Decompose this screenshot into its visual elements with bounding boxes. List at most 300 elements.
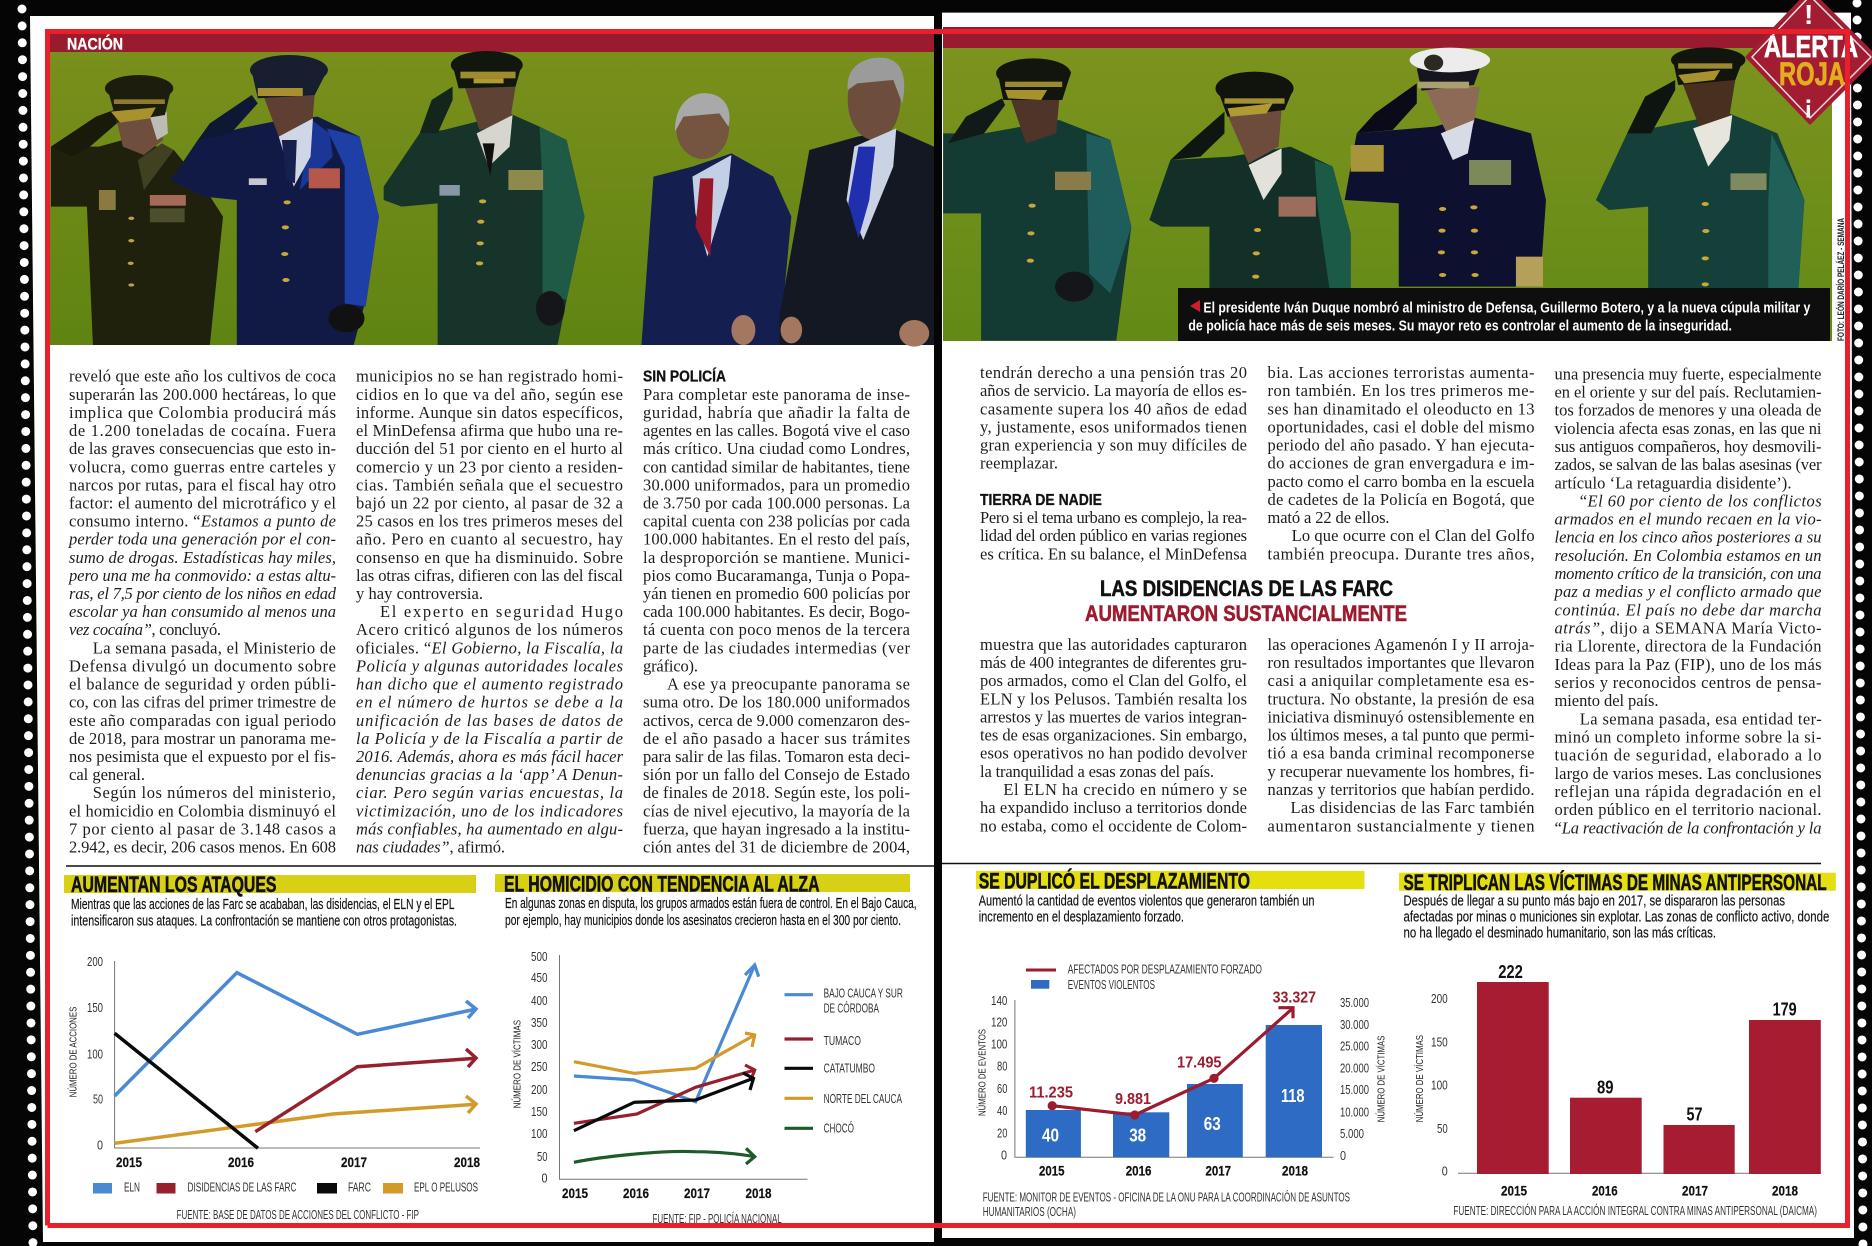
- badge exclamation bottom: ¡: [1804, 89, 1813, 119]
- article column 2: 25 casos en los tres primeros meses del: [356, 512, 623, 531]
- article column 6: atrás”, dijo a SEMANA María Victo-: [1554, 618, 1822, 638]
- badge word roja: ROJA: [1779, 56, 1845, 92]
- article column 4 with subheading: [980, 363, 1248, 835]
- chart 2 line: Norte del Cauca: [574, 1033, 755, 1073]
- pull quote heading: LAS DISIDENCIAS DE LAS FARC: [1100, 576, 1393, 601]
- article column 2: las otras cifras, difieren con las del fiscal: [356, 566, 623, 585]
- chart 2 axes and tick labels: 450: [531, 971, 548, 985]
- article column 6: [1554, 364, 1822, 837]
- article column 5: iniciativa disminuyó ostensiblemente en: [1268, 708, 1534, 726]
- article column 3 with subheading: yán tienen en promedio 600 policías por: [643, 584, 910, 603]
- article column 6: La semana pasada, esa entidad ter-: [1580, 709, 1822, 728]
- chart 3 axes and tick labels: 120: [991, 1016, 1007, 1030]
- article column 1: de 1.200 toneladas de cocaína. Fuera: [69, 421, 337, 440]
- chart 3 axes and tick labels: 35.000: [1340, 996, 1369, 1010]
- article column 2: Acero criticó algunos de los números: [356, 620, 623, 639]
- right page sheet: [942, 13, 1854, 1238]
- article column 2: informe. Aunque sin datos específicos,: [356, 403, 623, 422]
- caption marker: [1190, 300, 1200, 312]
- article column 3 with subheading: 100.000 habitantes. En el resto del país,: [643, 530, 910, 549]
- article column 6: tuación de seguridad, elaborado a lo: [1554, 746, 1822, 765]
- chart 3 axes and tick labels: 10.000: [1340, 1105, 1369, 1119]
- subheading: sin policía: SIN POLICÍA: [643, 369, 726, 386]
- chart 3 axes and tick labels: 2015: [1039, 1163, 1065, 1179]
- chart 3 axes and tick labels: NÚMERO DE EVENTOS: [976, 1029, 988, 1116]
- chart 2 description: En algunas zonas en disputa, los grupos armados están fuera de control. En el Bajo Cauca,: [505, 896, 917, 912]
- section band, left page: [50, 34, 934, 53]
- article column 6: ria Llorente, directora de la Fundación: [1554, 637, 1822, 656]
- article column 5: tructura. No obstante, la presión de esa: [1268, 689, 1535, 708]
- article column 2: victimización, uno de los indicadores: [356, 801, 623, 820]
- chart 3 line: afectados por desplazamiento forzado: 9.881: [1115, 1091, 1151, 1108]
- chart 3 heading bar: SE DUPLICÓ EL DESPLAZAMIENTO: [979, 868, 1250, 893]
- chart 3 axes and tick labels: 5.000: [1340, 1127, 1364, 1141]
- article column 6: zados, se salvan de las balas asesinas (ver: [1554, 455, 1822, 474]
- chart 4 axes and tick labels: 2016: [1592, 1183, 1618, 1199]
- chart 4 axes and tick labels: NÚMERO DE VÍCTIMAS: [1413, 1035, 1426, 1122]
- film strip perforations, right: [1857, 3, 1863, 1246]
- article column 3 with subheading: ción antes del 31 de diciembre de 2004,: [643, 838, 910, 857]
- article column 3 with subheading: 30.000 uniformados, para un promedio: [643, 475, 910, 494]
- chart 4 axes and tick labels: 150: [1431, 1035, 1448, 1049]
- article column 2: El experto en seguridad Hugo: [380, 602, 623, 621]
- chart 3 axes and tick labels: 25.000: [1340, 1040, 1369, 1054]
- chart 4 description: no ha llegado el desminado humanitario, son las más críticas.: [1404, 925, 1716, 941]
- article column 2: [355, 367, 624, 857]
- chart 2 axes and tick labels: 150: [531, 1105, 548, 1119]
- general 6 in green uniform: [943, 58, 1131, 341]
- chart 2 axes and tick labels: 0: [542, 1172, 548, 1186]
- chart 1 legend: ELN: [124, 1181, 140, 1195]
- article column 2: han dicho que el aumento registrado: [356, 675, 623, 694]
- chart 2 legend: TUMACO: [824, 1034, 861, 1048]
- chart 3 bars: eventos violentos: 63: [1204, 1114, 1221, 1134]
- article column 6: “El 60 por ciento de los conflictos: [1580, 491, 1822, 510]
- article column 6: serios y reconocidos centros de pensa-: [1554, 673, 1822, 692]
- chart 2 description: por ejemplo, hay municipios donde los asesinatos crecieron hasta en el 300 por ciento.: [505, 913, 901, 929]
- chart 3 description: Aumentó la cantidad de eventos violentos que generaron también un: [979, 894, 1314, 910]
- chart 1 line: disidencias de las FARC: [255, 1049, 476, 1132]
- article column 5: casi a aniquilar completamente esa es-: [1268, 671, 1534, 690]
- article column 6: en el oriente y sur del país. Reclutamien-: [1554, 382, 1822, 402]
- article column 4 with subheading: años de servicio. La mayoría de ellos es-: [980, 381, 1247, 400]
- article column 6: miento del país.: [1554, 691, 1658, 710]
- article column 5: bia. Las acciones terroristas aumenta-: [1268, 363, 1534, 382]
- chart 1 axes and tick labels: 200: [87, 955, 103, 969]
- chart 3 description: incremento en el desplazamiento forzado.: [979, 910, 1184, 926]
- article column 4 with subheading: Pero si el tema urbano es complejo, la rea-: [980, 508, 1247, 527]
- chart 1 axes and tick labels: 100: [87, 1048, 103, 1062]
- article column 1: co, con las cifras del primer trimestre de: [69, 693, 336, 712]
- chart 4 bars: 57: [1686, 1105, 1702, 1125]
- article column 3 with subheading: A ese ya preocupante panorama se: [667, 675, 910, 694]
- chart 4 axes and tick labels: 100: [1431, 1079, 1448, 1093]
- article column 1: Defensa divulgó un documento sobre: [69, 656, 336, 676]
- article column 5: tió a esa banda criminal recomponerse: [1268, 744, 1534, 763]
- article column 5: pacto como el carro bomba en la escuela: [1268, 472, 1535, 491]
- article column 4 with subheading: lidad del orden público en varias regiones: [980, 526, 1247, 545]
- chart 2 axes and tick labels: 2016: [623, 1185, 649, 1201]
- chart 2 axes and tick labels: NÚMERO DE VÍCTIMAS: [510, 1020, 524, 1108]
- chart 1 source: FUENTE: BASE DE DATOS DE ACCIONES DEL CONFLICTO - FIP: [177, 1208, 419, 1222]
- article column 2: 2016. Además, ahora es más fácil hacer: [356, 747, 624, 766]
- article column 5: periodo del año pasado. Y han ejecuta-: [1268, 436, 1534, 454]
- chart 2 legend: NORTE DEL CAUCA: [824, 1092, 902, 1106]
- chart 1 legend: FARC: [348, 1181, 371, 1195]
- left page sheet: [30, 16, 934, 1242]
- article column 2: la Policía y de la Fiscalía a partir de: [356, 729, 623, 748]
- chart 3 bars: eventos violentos: 38: [1129, 1126, 1146, 1146]
- chart 3 axes and tick labels: 2016: [1126, 1163, 1152, 1179]
- article column 6: sus antiguos compañeros, hoy desmovili-: [1554, 437, 1822, 456]
- article column 6: lencia en los cinco años posteriores a su: [1554, 528, 1822, 547]
- chart 1 line: ELN: [115, 973, 476, 1096]
- chart 3 axes and tick labels: 140: [991, 994, 1007, 1008]
- chart 3 axes and tick labels: 2018: [1282, 1163, 1308, 1179]
- article column 6: una presencia muy fuerte, especialmente: [1554, 364, 1822, 383]
- article column 1: 7 por ciento al pasar de 3.148 casos a: [69, 820, 337, 838]
- article column 6: violencia afecta esas zonas, en las que ni: [1554, 419, 1822, 438]
- article column 3 with subheading: la desproporción se mantiene. Munici-: [643, 548, 910, 567]
- article column 3 with subheading: guridad, habría que añadir la falta de: [643, 403, 910, 422]
- article column 6: artículo ‘La retaguardia disidente’).: [1554, 473, 1792, 492]
- chart 1 legend: [93, 1181, 478, 1195]
- article column 1: vez cocaína”, concluyó.: [69, 620, 221, 639]
- article column 2: año. Pero en cuanto al secuestro, hay: [356, 530, 624, 549]
- article column 1: reveló que este año los cultivos de coca: [69, 367, 337, 386]
- chart 3 axes and tick labels: 2017: [1206, 1163, 1231, 1179]
- chart 4 axes and tick labels: 2015: [1501, 1183, 1527, 1199]
- article column 5: oportunidades, casi el doble del mismo: [1268, 417, 1534, 436]
- article column 3 with subheading: agentes en las calles. Bogotá vive el caso: [643, 421, 910, 440]
- chart 2 heading bar: EL HOMICIDIO CON TENDENCIA AL ALZA: [504, 872, 820, 897]
- chart 3 bars: eventos violentos: [1026, 1025, 1322, 1157]
- article column 2: unificación de las bases de datos de: [356, 711, 623, 730]
- chart 3 bars: eventos violentos: 40: [1042, 1126, 1059, 1146]
- chart 1 legend: DISIDENCIAS DE LAS FARC: [188, 1181, 296, 1195]
- photo credit: FOTO: LEÓN DARÍO PELÁEZ - SEMANA: [1835, 218, 1846, 341]
- chart 1 axes and tick labels: 2017: [341, 1154, 367, 1170]
- article column 1: implica que Colombia producirá más: [69, 403, 336, 422]
- article column 5: las operaciones Agamenón I y II arroja-: [1268, 635, 1534, 654]
- article column 2: comercio y un 23 por ciento a residen-: [356, 457, 623, 476]
- article column 4 with subheading: gran experiencia y son muy difíciles de: [980, 436, 1247, 454]
- chart 1 line: EPL o Pelusos: [115, 1096, 476, 1143]
- chart 4 axes and tick labels: 0: [1442, 1165, 1448, 1179]
- chart 1 axes and tick labels: 2016: [228, 1154, 254, 1170]
- article column 1: perder toda una generación por el con-: [68, 530, 336, 549]
- article column 3 with subheading: de 3.750 por cada 100.000 personas. La: [643, 494, 911, 512]
- chart 1 description: intensificaron sus ataques. La confrontación se mantiene con otros protagonistas.: [71, 914, 457, 930]
- article column 3 with subheading: de finales de 2018. Según este, los poli-: [643, 783, 910, 802]
- panel: el homicidio con tendencia al alza line chart: [495, 872, 917, 1226]
- pull quote heading: [1085, 576, 1407, 626]
- article column 4 with subheading: la tranquilidad a esas zonas del país.: [980, 762, 1214, 781]
- chart 4 bars: 179: [1773, 1000, 1797, 1020]
- article column 4 with subheading: pos armados, como el Clan del Golfo, el: [980, 671, 1247, 690]
- article column 6: orden público en el territorio nacional.: [1554, 800, 1822, 819]
- chart 2 legend: CHOCÓ: [824, 1120, 854, 1136]
- chart 4 bars: 222: [1498, 962, 1523, 982]
- article column 1: [68, 367, 337, 857]
- article column 1: superarán las 200.000 hectáreas, lo que: [69, 385, 336, 404]
- section label: NACIÓN: [67, 34, 123, 53]
- chart 2 source: FUENTE: FIP - POLICÍA NACIONAL: [652, 1211, 782, 1226]
- chart 3 line: afectados por desplazamiento forzado: 17.495: [1177, 1054, 1222, 1071]
- chart 2 legend: [784, 986, 903, 1136]
- pull quote heading: AUMENTARON SUSTANCIALMENTE: [1085, 601, 1407, 626]
- article column 4 with subheading: muestra que las autoridades capturaron: [980, 635, 1247, 654]
- article column 6: armados en el mundo recaen en la vio-: [1554, 510, 1822, 529]
- chart 3 legend: [1026, 962, 1262, 992]
- chart 3 axes and tick labels: 80: [997, 1060, 1007, 1074]
- article column 3 with subheading: [643, 369, 911, 857]
- chart 2 axes and tick labels: 200: [531, 1083, 548, 1097]
- admiral in navy uniform: [1345, 48, 1546, 287]
- article column 3 with subheading: gráfico).: [643, 656, 698, 676]
- president in dark suit with blue tie: [779, 58, 934, 347]
- chart 4 bars: [1477, 962, 1821, 1174]
- article column 3 with subheading: para salir de las filas. Tomaron esta deci-: [643, 747, 910, 766]
- article column 1: el homicidio en Colombia disminuyó el: [69, 801, 336, 820]
- article column 1: 2.942, es decir, 206 casos menos. En 608: [69, 838, 336, 857]
- chart 2 axes and tick labels: 2015: [562, 1185, 588, 1201]
- chart 3 source: FUENTE: MONITOR DE EVENTOS - OFICINA DE LA ONU PARA LA COORDINACIÓN DE ASUNTOS: [983, 1190, 1350, 1205]
- article column 2: municipios no se han registrado homi-: [356, 367, 623, 386]
- chart 2 axes and tick labels: 2017: [684, 1185, 710, 1201]
- article column 4 with subheading: y, justamente, esos uniformados tienen: [980, 417, 1247, 436]
- article column 2: nas ciudades”, afirmó.: [356, 838, 505, 857]
- article column 3 with subheading: con cantidad similar de habitantes, tiene: [643, 457, 910, 476]
- article column 1: narcos por rutas, para el fiscal hay otro: [69, 475, 336, 494]
- photo, right page: commanders saluting: [943, 47, 1832, 341]
- article column 4 with subheading: esos operativos no han podido devolver: [980, 744, 1248, 763]
- chart 1 axes and tick labels: 150: [87, 1001, 103, 1015]
- article column 3 with subheading: de el año pasado a hacer sus trámites: [643, 729, 910, 748]
- chart 3 legend: EVENTOS VIOLENTOS: [1068, 978, 1155, 992]
- article column 1: pero una me ha conmovido: a estas altu-: [68, 566, 336, 585]
- article column 4 with subheading: ELN y los Pelusos. También resalta los: [980, 689, 1247, 708]
- chart 4 bars: 89: [1597, 1077, 1614, 1097]
- chart 1 axes and tick labels: 50: [93, 1092, 103, 1106]
- article column 1: cal general.: [69, 765, 145, 784]
- chart 3 axes and tick labels: 30.000: [1340, 1018, 1369, 1032]
- article column 4 with subheading: no estaba, como el occidente de Colom-: [980, 816, 1247, 835]
- article column 5: aumentaron sustancialmente y tienen: [1268, 816, 1534, 835]
- chart 3 axes and tick labels: 0: [1340, 1149, 1346, 1163]
- article column 1: de las graves consecuencias que esto in-: [69, 439, 336, 458]
- article column 1: el balance de seguridad y orden públi-: [69, 675, 336, 694]
- chart 3 axes and tick labels: 40: [997, 1104, 1007, 1118]
- chart 1 axes and tick labels: 2015: [116, 1154, 142, 1170]
- article column 6: tos forzados de menores y una oleada de: [1554, 401, 1822, 420]
- chart 1 description: Mientras que las acciones de las Farc se acababan, las disidencias, el ELN y el EPL: [71, 897, 454, 913]
- chart 2 axes and tick labels: 100: [531, 1127, 548, 1141]
- general 1 in olive uniform: [51, 75, 223, 345]
- general 3 in green uniform: [384, 51, 585, 345]
- article column 6: minó un completo informe sobre la si-: [1554, 728, 1822, 746]
- chart 1 heading bar: AUMENTAN LOS ATAQUES: [71, 872, 276, 897]
- article column 3 with subheading: tá cuenta con poco menos de la tercera: [643, 620, 911, 639]
- chart 3 source: HUMANITARIOS (OCHA): [983, 1205, 1076, 1219]
- article column 2: consenso en que ha disminuido. Sobre: [356, 548, 623, 567]
- article column 5: ron resultados importantes que llevaron: [1268, 653, 1534, 672]
- article column 2: cias. También señala que el secuestro: [356, 475, 623, 494]
- article column 1: sumo de drogas. Estadísticas hay miles,: [69, 548, 336, 567]
- article column 4 with subheading: más de 400 integrantes de diferentes gru-: [980, 653, 1247, 672]
- article column 2: ducción del 51 por ciento en el hurto al: [356, 439, 623, 458]
- film strip perforations, left: [22, 9, 33, 1246]
- article column 2: más confiables, ha aumentado en algu-: [356, 820, 623, 838]
- section band, right page: [943, 27, 1803, 48]
- article column 1: este año comparadas con igual periodo: [69, 711, 336, 730]
- article column 5: de cadetes de la Policía en Bogotá, que: [1268, 490, 1534, 509]
- chart 3 source: [983, 1190, 1350, 1219]
- article column 3 with subheading: sión por un fallo del Consejo de Estado: [643, 765, 910, 784]
- chart 1 axes and tick labels: 2018: [454, 1154, 480, 1170]
- chart 2 legend: BAJO CAUCA Y SUR: [824, 986, 903, 1000]
- chart 2 axes and tick labels: 500: [531, 950, 548, 964]
- article column 5: también preocupa. Durante tres años,: [1268, 544, 1534, 563]
- article column 1: La semana pasada, el Ministerio de: [93, 638, 336, 657]
- chart 2 axes and tick labels: 400: [531, 994, 548, 1008]
- chart 1 axes and tick labels: 0: [97, 1138, 103, 1152]
- article column 3 with subheading: cías de nivel ejecutivo, la mayoría de la: [643, 801, 911, 820]
- article column 3 with subheading: fuerza, que hayan ingresado a la institu-: [643, 820, 910, 838]
- chart 2 axes and tick labels: 2018: [746, 1185, 772, 1201]
- article column 2: oficiales. “El Gobierno, la Fiscalía, la: [356, 638, 623, 657]
- article column 4 with subheading: reemplazar.: [980, 454, 1058, 473]
- chart 2 legend: CATATUMBO: [824, 1062, 875, 1076]
- article column 5: do acciones de gran envergadura e im-: [1268, 454, 1534, 473]
- chart 3 legend: AFECTADOS POR DESPLAZAMIENTO FORZADO: [1068, 962, 1262, 976]
- article column 6: largo de varios meses. Las conclusiones: [1554, 764, 1822, 783]
- chart 2 line: Tumaco: [574, 1065, 755, 1123]
- article column 1: escolar ya han consumido al menos una: [69, 602, 336, 621]
- article column 3 with subheading: cada 100.000 habitantes. Es decir, Bogo-: [643, 602, 910, 621]
- article column 5: mató a 22 de ellos.: [1268, 508, 1390, 527]
- article column 2: cidios en lo que va del año, según ese: [356, 385, 623, 404]
- article column 6: resolución. En Colombia estamos en un: [1554, 546, 1822, 565]
- chart 2 legend: DE CÓRDOBA: [824, 1000, 879, 1016]
- chart 3 axes and tick labels: 100: [991, 1037, 1007, 1051]
- chart 2 line: Bajo Cauca y sur de Córdoba: [574, 965, 759, 1102]
- chart 1 axes and tick labels: [66, 955, 480, 1170]
- badge: alerta roja: [1747, 0, 1872, 123]
- article column 3 with subheading: pios como Bucaramanga, Tunja o Popa-: [643, 566, 910, 585]
- article column 1: volucra, como guerras entre carteles y: [69, 457, 337, 476]
- article column 6: reflejan una rápida degradación en el: [1554, 782, 1822, 801]
- center gutter: [934, 0, 942, 1246]
- article column 4 with subheading: es crítica. En su balance, el MinDefensa: [980, 544, 1248, 563]
- chart 3 axes and tick labels: 15.000: [1340, 1083, 1369, 1097]
- article column 6: “La reactivación de la confrontación y la: [1554, 818, 1822, 837]
- chart 3 axes and tick labels: 0: [1001, 1149, 1007, 1163]
- article column 2: bajó un 22 por ciento, al pasar de 32 a: [356, 494, 624, 512]
- article column 3 with subheading: suma otro. De los 180.000 uniformados: [643, 693, 910, 712]
- article column 1: Según los números del ministerio,: [93, 783, 336, 802]
- chart 3 description: [979, 894, 1314, 926]
- article column 3 with subheading: activos, cerca de 9.000 comenzaron des-: [643, 711, 910, 730]
- article column 1: de 2018, para mostrar un panorama me-: [69, 729, 336, 748]
- general 9 in green uniform: [1596, 47, 1804, 288]
- chart 3 line: afectados por desplazamiento forzado: [1029, 990, 1316, 1120]
- general 2 in air force blue: [171, 55, 379, 345]
- chart 3 axes and tick labels: 60: [997, 1082, 1007, 1096]
- chart 1 line: FARC: [115, 1033, 258, 1148]
- article column 3 with subheading: capital cuenta con 238 policías por cada: [643, 512, 911, 531]
- chart 2 line: Catatumbo: [574, 1073, 754, 1131]
- article column 5: y recuperar nuevamente los hombres, fi-: [1268, 762, 1534, 781]
- article column 2: ciar. Pero según varias encuestas, la: [356, 783, 623, 802]
- article column 1: ras, el 7,5 por ciento de los niños en edad: [69, 584, 337, 603]
- article column 2: el MinDefensa afirma que hubo una re-: [356, 421, 623, 440]
- chart 2 axes and tick labels: 50: [537, 1150, 548, 1164]
- article column 4 with subheading: tendrán derecho a una pensión tras 20: [980, 363, 1247, 382]
- chart 4 axes and tick labels: [1413, 992, 1821, 1199]
- chart 1 description: [71, 897, 457, 930]
- article column 2: en el número de hurtos se debe a la: [356, 693, 623, 712]
- chart 2 axes and tick labels: [510, 950, 808, 1201]
- article column 2: Policía y algunas autoridades locales: [355, 656, 623, 676]
- chart 1 heading bar: [64, 872, 476, 897]
- chart 1 legend: EPL O PELUSOS: [414, 1181, 478, 1195]
- minister in navy suit: [641, 93, 791, 345]
- chart 2 line: Chocó: [574, 1148, 755, 1164]
- article column 2: denuncias gracias a la ‘app’ A Denun-: [356, 765, 623, 784]
- chart 3 axes and tick labels: 20: [997, 1126, 1007, 1140]
- chart 2 axes and tick labels: 250: [531, 1060, 548, 1074]
- panel: aumentan los ataques line chart: [64, 872, 480, 1222]
- article column 5: nanzas y territorios que habían perdido.: [1268, 780, 1534, 799]
- article column 2: y hay controversia.: [356, 584, 483, 603]
- article column 5: Lo que ocurre con el Clan del Golfo: [1292, 526, 1535, 545]
- chart 2 axes and tick labels: 350: [531, 1016, 548, 1030]
- article column 4 with subheading: casamente supera los 40 años de edad: [980, 399, 1248, 418]
- article column 3 with subheading: más crítico. Una ciudad como Londres,: [643, 439, 910, 458]
- chart 3 bars: eventos violentos: 118: [1281, 1086, 1304, 1106]
- chart 3 line: afectados por desplazamiento forzado: 33.327: [1273, 990, 1316, 1007]
- photo caption: [1178, 288, 1830, 341]
- article column 4 with subheading: El ELN ha crecido en número y se: [1003, 780, 1247, 799]
- chart 2 axes and tick labels: 300: [531, 1038, 548, 1052]
- article column 6: momento crítico de la transición, con una: [1554, 564, 1822, 583]
- article column 6: Ideas para la Paz (FIP), uno de los más: [1554, 655, 1822, 674]
- article column 4 with subheading: tes de esas organizaciones. Sin embargo,: [980, 726, 1247, 745]
- chart 4 axes and tick labels: 2017: [1682, 1183, 1708, 1199]
- panel: se triplican las víctimas de minas bar chart: [1399, 870, 1836, 1218]
- chart 4 description: [1404, 894, 1829, 941]
- panel: se duplicó el desplazamiento combo chart: [976, 868, 1388, 1219]
- chart 4 axes and tick labels: 2018: [1772, 1183, 1798, 1199]
- article column 3 with subheading: parte de las ciudades intermedias (ver: [643, 638, 910, 657]
- subheading: tierra de nadie: TIERRA DE NADIE: [980, 492, 1102, 509]
- article column 1: consumo interno. “Estamos a punto de: [69, 512, 336, 531]
- article column 5: ron también. En los tres primeros me-: [1268, 381, 1534, 400]
- article column 4 with subheading: ha expandido incluso a territorios donde: [980, 798, 1247, 817]
- chart 2 description: [505, 896, 917, 929]
- article column 5: ses han dinamitado el oleoducto en 13: [1268, 399, 1534, 418]
- article column 1: factor: el aumento del microtráfico y el: [69, 494, 336, 512]
- chart 3 axes and tick labels: [976, 994, 1388, 1179]
- article column 6: paz a medias y el conflicto armado que: [1554, 582, 1822, 601]
- chart 3 line: afectados por desplazamiento forzado: 11.235: [1029, 1084, 1073, 1101]
- article column 6: continúa. El país no debe dar marcha: [1554, 600, 1822, 619]
- article column 5: [1268, 363, 1535, 835]
- article column 4 with subheading: arrestos y las muertes de varios integran-: [980, 708, 1247, 726]
- chart 3 axes and tick labels: NÚMERO DE VÍCTIMAS: [1374, 1036, 1388, 1122]
- photo, left page: commanders saluting with minister and president: [50, 51, 934, 347]
